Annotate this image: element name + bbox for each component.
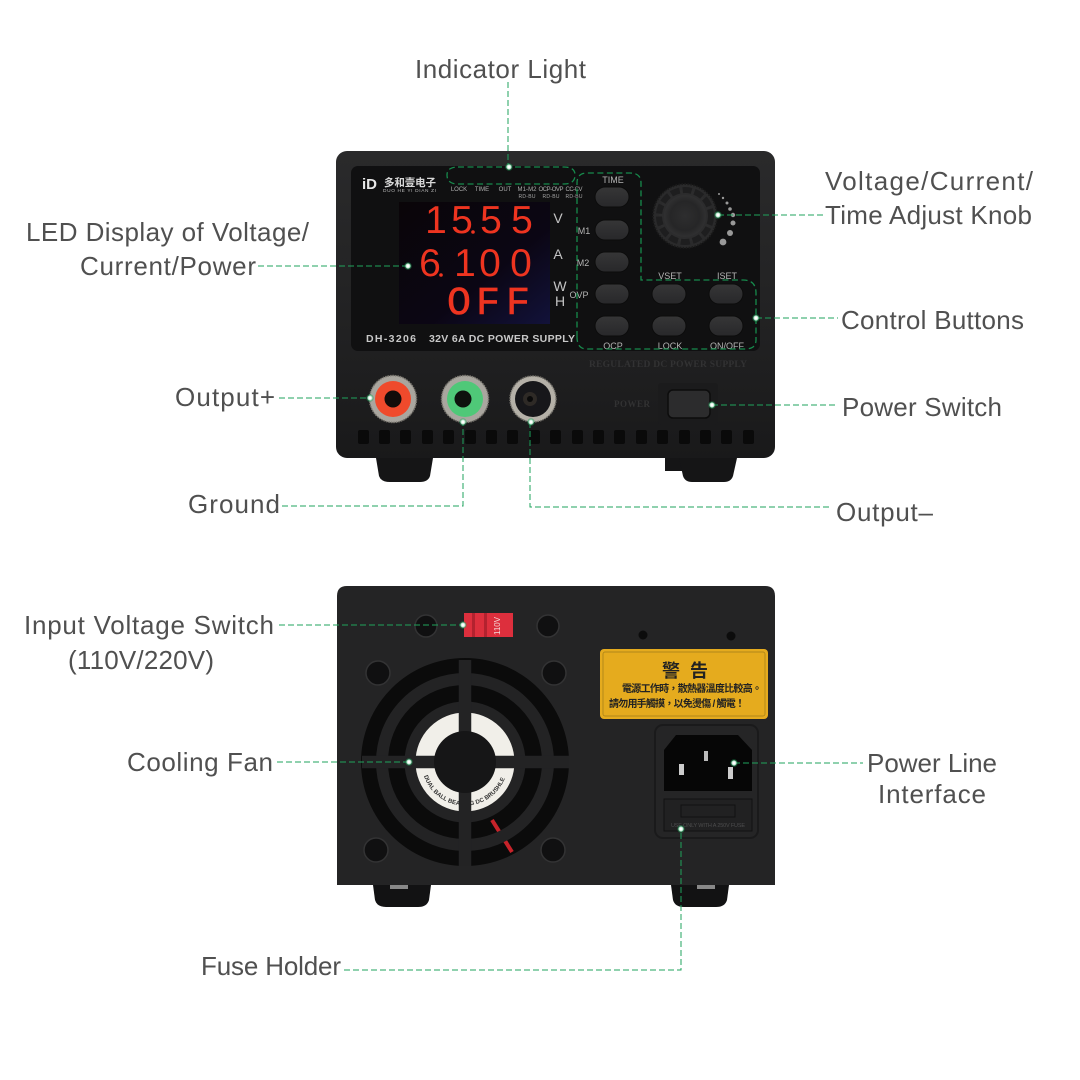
labels: Power Line (867, 748, 997, 778)
indicator labels: RD-BU (542, 194, 560, 200)
fuse holder: USE ONLY WITH A 250V FUSE (671, 823, 745, 829)
indicator labels: CC-CV (566, 187, 582, 193)
button labels: LOCK (658, 341, 682, 351)
display unit labels: A (553, 246, 563, 262)
LED display (399, 199, 550, 327)
button labels: TIME (602, 175, 624, 185)
display unit labels: W (553, 278, 567, 294)
button labels: OVP (569, 290, 589, 300)
model text: 32V 6A DC POWER SUPPLY (429, 333, 575, 345)
indicator labels (451, 187, 583, 200)
indicator labels: TIME (475, 187, 489, 193)
display unit labels (553, 210, 567, 309)
mounting holes (638, 630, 736, 640)
ventilation slots (358, 430, 754, 444)
panel: rear view of power supply (337, 586, 775, 907)
voltage selector switch: 110V (493, 616, 502, 635)
button labels: M1 (578, 226, 590, 236)
labels: Power Switch (842, 392, 1002, 422)
button labels: VSET (658, 271, 682, 281)
labels: Control Buttons (841, 305, 1024, 335)
LED display: 1555 (425, 199, 533, 242)
indicator labels: RD-BU (566, 194, 583, 200)
brand logo: 多和壹电子 (384, 176, 436, 189)
lower panel silkscreen: REGULATED DC POWER SUPPLY (589, 360, 747, 370)
labels: Voltage/Current/ (825, 166, 1034, 196)
voltage selector switch (464, 613, 513, 637)
indicator labels: OCP-OVP (538, 187, 564, 193)
button labels: ISET (717, 271, 737, 281)
button labels: M2 (577, 258, 589, 268)
labels: Ground (188, 489, 280, 519)
lower panel silkscreen: POWER (614, 399, 650, 409)
labels: Output+ (175, 382, 275, 412)
model text (366, 333, 575, 345)
buttons (595, 187, 743, 336)
indicator labels: OUT (499, 187, 512, 193)
warning label: 請勿用手觸摸，以免燙傷 / 觸電！ (609, 697, 745, 710)
button labels: OCP (603, 341, 623, 351)
fan label ring: DUAL BALL BEARING DC BRUSHLESS (424, 774, 505, 806)
button labels (569, 175, 744, 351)
fan wires (492, 820, 512, 852)
labels: Input Voltage Switch (24, 610, 274, 640)
rear feet (373, 885, 729, 907)
front case (336, 151, 775, 458)
labels: Output– (836, 497, 934, 527)
fan guard (362, 660, 569, 866)
lower panel silkscreen (589, 360, 747, 409)
indicator labels: RD-BU (518, 194, 536, 200)
labels: Interface (878, 779, 986, 809)
button labels: ON/OFF (710, 341, 744, 351)
warning label: 電源工作時，散熱器溫度比較高。 (622, 682, 762, 695)
adjust knob (653, 184, 736, 248)
panel: front view of power supply (336, 151, 775, 482)
indicator labels: LOCK (451, 187, 467, 193)
labels: Time Adjust Knob (825, 200, 1032, 230)
model text: DH-3206 (366, 333, 416, 345)
LED display: OFF (447, 282, 530, 327)
labels: LED Display of Voltage/ (26, 217, 310, 247)
fan label ring (416, 712, 514, 811)
indicator labels: M1-M2 (518, 187, 537, 193)
labels: Current/Power (80, 251, 256, 281)
display unit labels: V (553, 210, 563, 226)
front control panel (351, 166, 760, 351)
output minus terminal (510, 376, 556, 422)
front feet (376, 458, 737, 482)
labels: Fuse Holder (201, 951, 341, 981)
callout dots (367, 164, 759, 832)
rear case (337, 586, 775, 885)
brand logo: DUO HE YI DIAN ZI (383, 188, 436, 194)
labels: (110V/220V) (68, 645, 214, 675)
output plus terminal (370, 376, 416, 422)
warning label (600, 649, 768, 719)
cooling fan (361, 658, 569, 866)
warning label: 警 告 (662, 661, 708, 681)
labels: Indicator Light (415, 54, 587, 84)
power switch (658, 383, 718, 425)
ground terminal (442, 376, 488, 422)
power inlet socket and fuse drawer (655, 725, 758, 838)
brand logo: iD (362, 176, 377, 193)
callouts: leader lines (258, 82, 863, 970)
labels: Cooling Fan (127, 747, 273, 777)
fan hub (434, 731, 496, 793)
brand logo (362, 176, 436, 194)
LED display: 6100 (419, 242, 532, 285)
display unit labels: H (555, 293, 565, 309)
case screws (364, 615, 566, 862)
